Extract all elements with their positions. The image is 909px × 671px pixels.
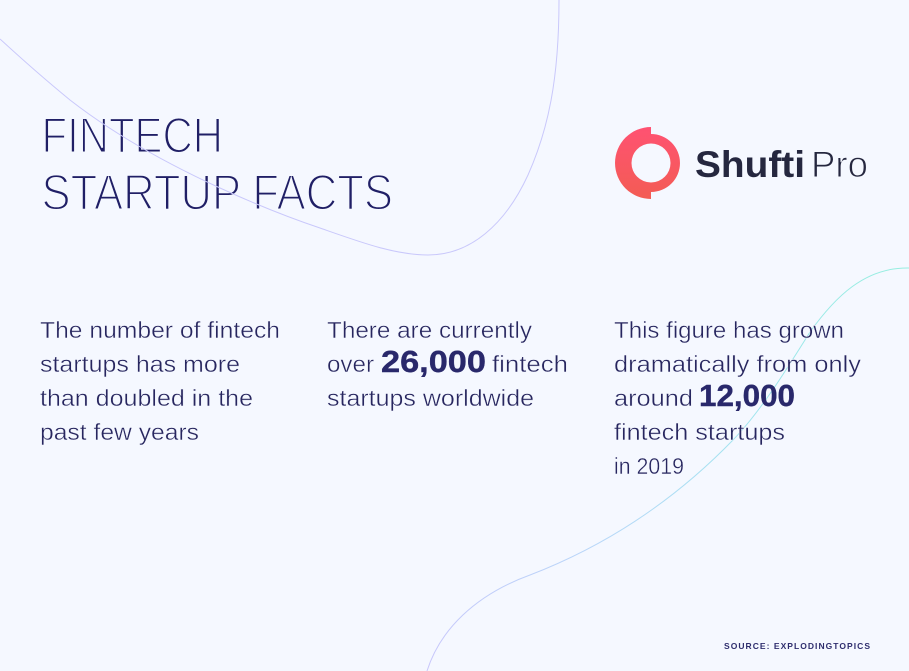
text block: fact two: fintech [492,351,568,377]
logo wordmark: Shufti [695,144,805,185]
logo: Shufti Pro [615,127,868,199]
text block: fact three: This figure has grown [614,317,844,343]
text block: fact one: past few years [40,419,199,445]
decorative curve: bottom teal [427,268,909,671]
text block: fact three: around [614,385,693,411]
text block: fact one: The number of fintech [40,317,280,343]
text block: fact three [614,317,862,479]
text block: fact two: startups worldwide [327,385,534,411]
number: 26,000: 26,000 [381,344,486,379]
source note: SOURCE: EXPLODINGTOPICS [724,641,870,651]
text block: fact one: startups has more [40,351,240,377]
icon: logo ring [615,127,680,199]
text block: fact two [327,317,568,411]
text block: fact two: over [327,351,374,377]
title: FINTECH [42,108,223,164]
logo: Shufti Pro: Pro [811,144,868,185]
number: 12,000: 12,000 [699,378,795,413]
text block: fact three: dramatically from only [614,351,862,377]
text block: fact two: There are currently [327,317,533,343]
text block: fact three: in 2019 [614,453,684,479]
title: STARTUP FACTS [42,164,393,220]
decorative curve: top lilac [0,0,559,255]
text block: fact one [40,317,280,445]
title [42,108,393,220]
text block: fact three: fintech startups [614,419,785,445]
text block: fact one: than doubled in the [40,385,253,411]
